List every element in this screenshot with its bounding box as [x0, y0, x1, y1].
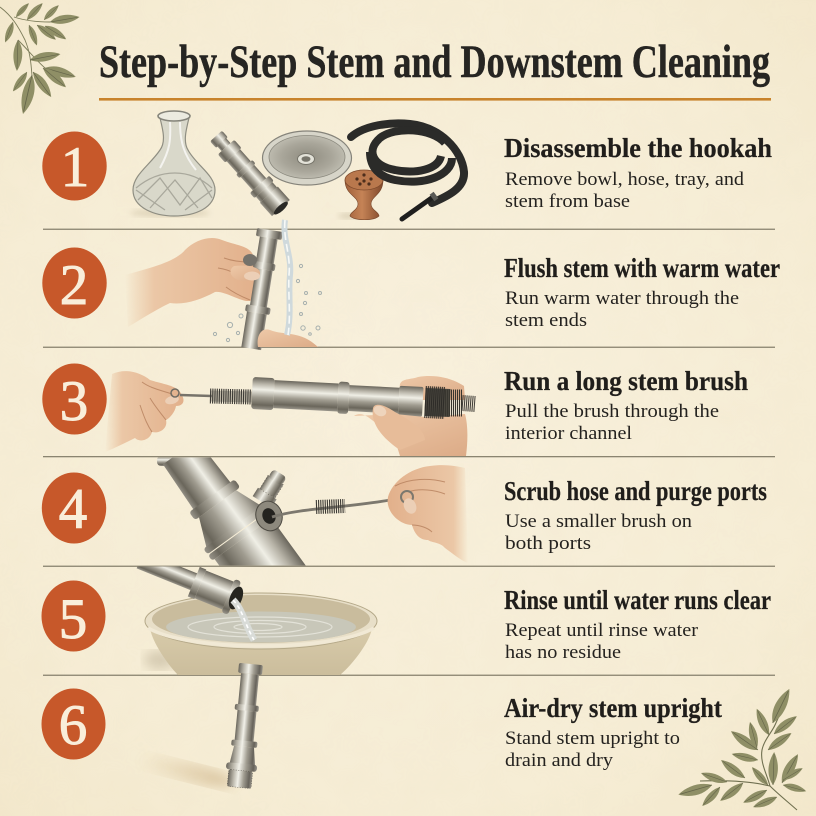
leaf branch: bottom right — [677, 686, 807, 811]
number badge 1: 1 — [61, 136, 89, 199]
number badge 6: 6 — [59, 694, 87, 757]
step 3 text: interior channel — [505, 423, 632, 444]
step 6 text: drain and dry — [505, 750, 614, 771]
step 4 text: both ports — [505, 533, 591, 554]
step 1 panel — [42, 111, 464, 220]
number badge 6 — [42, 688, 106, 760]
number badge 4 — [42, 472, 106, 544]
number badge 5 — [42, 580, 106, 652]
number badge 2 — [42, 248, 107, 318]
illustration: stem drying upright — [134, 663, 267, 792]
illustration: disassembled hookah parts — [130, 111, 464, 220]
step 3 text: Run a long stem brush — [504, 366, 748, 396]
step 6 text: Air-dry stem upright — [504, 693, 722, 723]
title rule — [99, 98, 771, 101]
step 5 text: Repeat until rinse water — [505, 620, 699, 641]
step 4 text: Use a smaller brush on — [505, 511, 693, 532]
step 4 panel — [42, 458, 466, 566]
step 6 text — [504, 693, 722, 771]
illustration: rinsing into basin — [136, 566, 378, 675]
step 5 text — [504, 585, 771, 663]
step 4 text — [504, 476, 767, 554]
number badge 5: 5 — [59, 588, 87, 651]
step 2 text: Run warm water through the — [505, 288, 739, 309]
leaf branch: top left — [0, 1, 80, 115]
illustration: scrubbing hose port — [157, 458, 466, 566]
step 1 text — [504, 133, 772, 212]
step 2 text — [504, 253, 780, 331]
step 1 text: stem from base — [505, 191, 630, 212]
step 2 panel — [42, 220, 322, 351]
step 1 text: Disassemble the hookah — [504, 133, 772, 163]
step 2 text: stem ends — [505, 310, 587, 331]
number badge 4: 4 — [59, 478, 87, 541]
number badge 3: 3 — [60, 370, 88, 433]
number badge 3 — [42, 364, 107, 434]
step 5 text: Rinse until water runs clear — [504, 585, 771, 615]
step 3 text: Pull the brush through the — [505, 401, 719, 422]
illustration: pulling brush through stem — [105, 371, 475, 456]
step 5 panel — [42, 566, 378, 675]
step 3 text — [504, 366, 748, 444]
step 5 text: has no residue — [505, 642, 621, 663]
illustration: flushing stem under water — [125, 220, 322, 351]
number badge 1 — [42, 132, 107, 200]
step 4 text: Scrub hose and purge ports — [504, 476, 767, 506]
step 6 text: Stand stem upright to — [505, 728, 680, 749]
step 3 panel — [42, 364, 475, 456]
number badge 2: 2 — [60, 254, 88, 317]
step 6 panel — [42, 663, 267, 792]
step 1 text: Remove bowl, hose, tray, and — [505, 169, 745, 190]
